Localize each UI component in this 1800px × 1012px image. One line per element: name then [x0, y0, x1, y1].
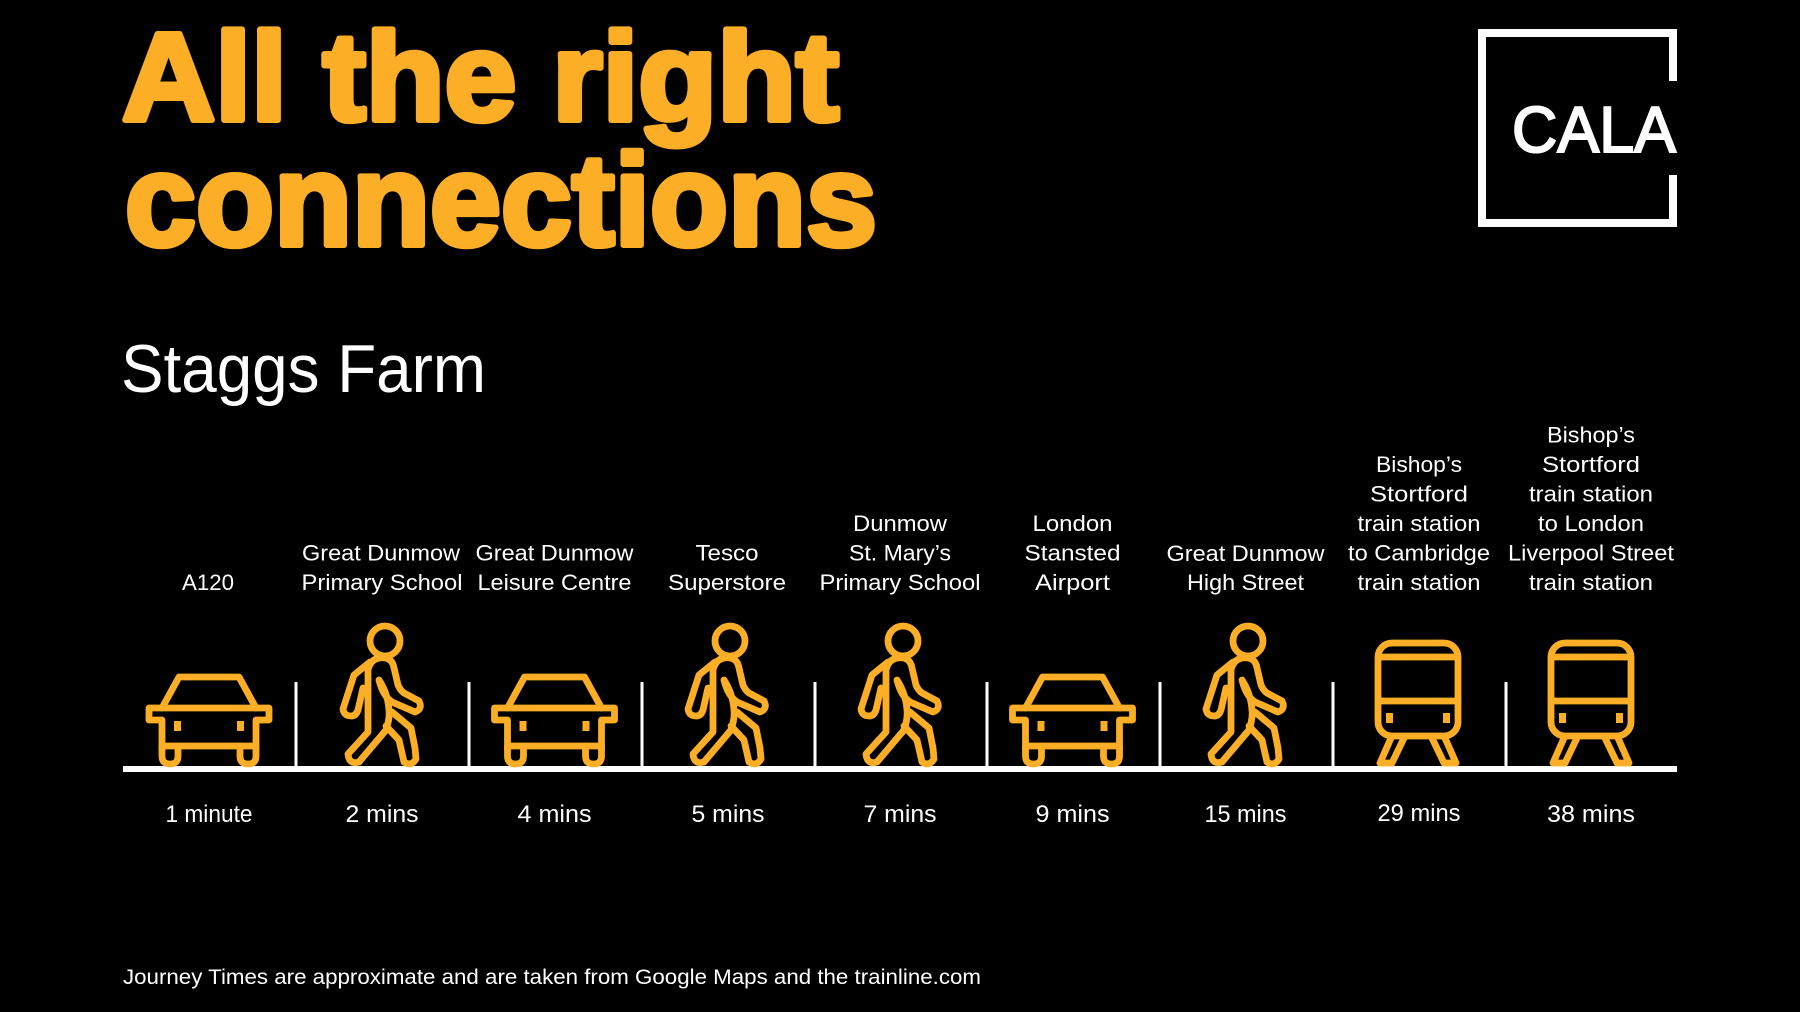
destination label: Great Dunmow — [1166, 541, 1325, 566]
destination label — [1166, 541, 1325, 595]
column: Bishop's Stortford to Cambridge — [1348, 452, 1490, 827]
column: Great Dunmow Leisure Centre — [476, 540, 634, 828]
journey time: 15 mins — [1204, 801, 1286, 828]
destination label — [820, 511, 980, 595]
icon: walking person — [688, 626, 765, 764]
destination label: Airport — [1035, 570, 1111, 595]
destination label — [1508, 422, 1675, 595]
title: connections — [125, 127, 877, 273]
journey time: 29 mins — [1378, 800, 1460, 827]
title: All the right — [122, 8, 839, 147]
logo: CALA: CALA — [1512, 93, 1677, 166]
logo: CALA — [1482, 33, 1677, 223]
column: Bishop's Stortford to London Liverpool Street — [1508, 422, 1675, 828]
destination label: Great Dunmow — [476, 540, 634, 566]
destination label — [302, 540, 462, 595]
journey time: 9 mins — [1036, 801, 1110, 828]
column: Great Dunmow Primary School — [302, 540, 462, 828]
icon: train — [1378, 643, 1458, 763]
destination label: train station — [1529, 482, 1653, 506]
column: Dunmow St. Mary's Primary School — [820, 511, 980, 828]
destination label: St. Mary’s — [849, 540, 951, 566]
destination label: Bishop’s — [1376, 452, 1462, 477]
destination label: Tesco — [696, 540, 758, 566]
journey time: 7 mins — [864, 801, 936, 828]
destination label: Stansted — [1024, 540, 1120, 566]
column: A120 — [149, 570, 269, 828]
journey time: 4 mins — [518, 801, 592, 828]
destination label: Primary School — [302, 570, 462, 595]
destination label: train station — [1358, 570, 1480, 595]
destination label: to London — [1538, 511, 1644, 536]
icon: walking person — [1206, 626, 1283, 764]
icon: car — [1012, 677, 1132, 764]
destination label: Primary School — [820, 570, 980, 595]
destination label — [1348, 452, 1490, 595]
column: Tesco Superstore — [668, 540, 786, 828]
timeline axis — [123, 682, 1677, 772]
destination label — [476, 540, 634, 595]
destination label: train station — [1358, 511, 1480, 536]
destination label: Dunmow — [853, 511, 948, 536]
destination label: Stortford — [1542, 452, 1640, 477]
icon: car — [494, 677, 614, 764]
destination label: Liverpool Street — [1508, 540, 1675, 566]
destination label: Great Dunmow — [302, 540, 461, 566]
title — [122, 8, 877, 273]
destination label: train station — [1529, 570, 1653, 595]
destination label: A120 — [182, 570, 234, 595]
footnote: Journey Times are approximate and are taken from Google Maps and the trainline.com — [123, 966, 981, 989]
destination label: to Cambridge — [1348, 540, 1490, 566]
icon: train — [1551, 643, 1631, 763]
journey time: 1 minute — [166, 801, 252, 828]
icon: car — [149, 677, 269, 764]
journey time: 38 mins — [1547, 801, 1635, 828]
column: London Stansted Airport — [1012, 511, 1132, 828]
destination label: Bishop’s — [1547, 422, 1635, 448]
icon: walking person — [861, 626, 938, 764]
column: Great Dunmow High Street — [1166, 541, 1325, 828]
destination label — [1024, 511, 1120, 595]
destination label: Superstore — [668, 570, 786, 595]
destination label: Stortford — [1370, 482, 1468, 506]
journey time: 5 mins — [692, 801, 764, 828]
destination label: High Street — [1187, 570, 1305, 595]
journey time: 2 mins — [346, 801, 418, 828]
destination label — [668, 540, 786, 595]
destination label: Leisure Centre — [478, 570, 632, 595]
destination label: London — [1032, 511, 1112, 536]
subtitle: Staggs Farm — [121, 331, 486, 407]
icon: walking person — [343, 626, 420, 764]
